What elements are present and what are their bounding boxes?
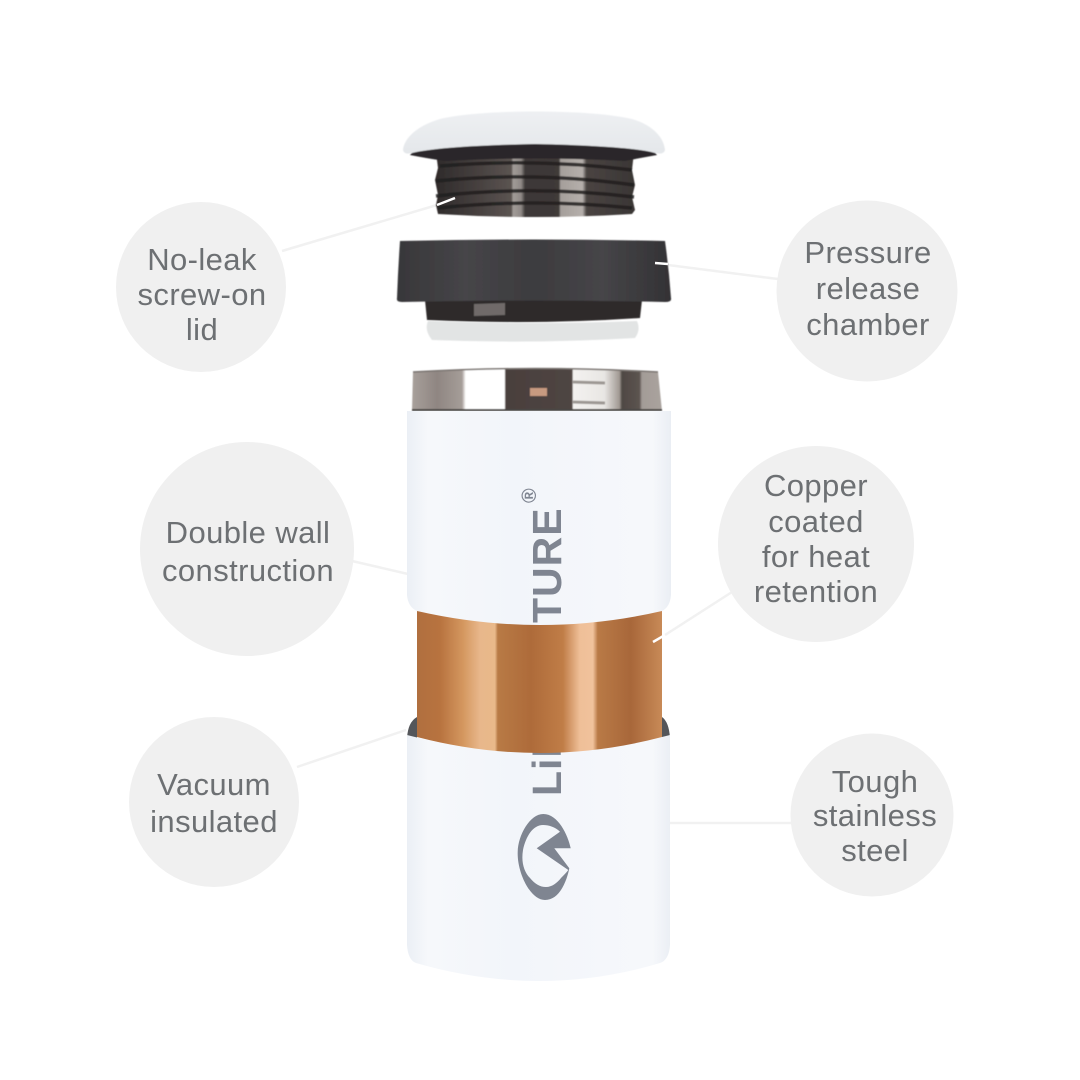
inner wall visible behind copper bbox=[407, 717, 670, 740]
brand text, upper part: TURE bbox=[524, 507, 570, 623]
callout: tough stainless steel: stainless bbox=[813, 798, 937, 833]
leader line: double wall bbox=[352, 561, 408, 574]
lid pointer tick bbox=[437, 198, 455, 205]
callout: pressure release chamber: chamber bbox=[806, 307, 930, 342]
callout: tough stainless steel bbox=[790, 734, 954, 896]
callout: no-leak screw-on lid: lid bbox=[186, 312, 218, 347]
callout: copper coated for heat retention bbox=[718, 446, 914, 642]
flask illustration bbox=[397, 112, 671, 981]
callout: copper coated for heat retention: for heat bbox=[762, 539, 870, 574]
callout: double wall construction bbox=[140, 442, 354, 656]
callout: pressure release chamber: release bbox=[816, 271, 920, 306]
pressure release chamber collar bbox=[397, 240, 671, 342]
callout: pressure release chamber bbox=[776, 200, 958, 382]
callout: no-leak screw-on lid: screw-on bbox=[138, 277, 266, 312]
brand logo mark bbox=[518, 814, 571, 900]
leader line: stainless steel bbox=[667, 822, 792, 824]
callout: double wall construction: construction bbox=[162, 553, 334, 588]
leader line: pressure release chamber bbox=[668, 265, 778, 279]
callout: copper coated for heat retention: retention bbox=[754, 574, 878, 609]
callout: tough stainless steel: steel bbox=[841, 833, 909, 868]
callout: no-leak screw-on lid bbox=[116, 202, 286, 372]
callout: double wall construction: Double wall bbox=[166, 515, 330, 550]
leader line: no-leak lid bbox=[282, 205, 437, 251]
brand text, lower part: LiF bbox=[524, 732, 570, 796]
copper coated band bbox=[417, 600, 662, 753]
upper body bbox=[407, 411, 671, 625]
screw-on lid bbox=[403, 112, 665, 217]
callout: copper coated for heat retention: coated bbox=[768, 504, 864, 539]
callout: vacuum insulated bbox=[129, 717, 299, 887]
callout: vacuum insulated: Vacuum bbox=[157, 767, 271, 802]
copper pointer tick bbox=[653, 635, 665, 642]
collar pointer tick bbox=[655, 263, 668, 264]
leader line: vacuum insulated bbox=[297, 730, 406, 767]
registered mark: ® bbox=[519, 488, 541, 503]
lower body sleeve bbox=[407, 735, 670, 981]
callout: copper coated for heat retention: Copper bbox=[764, 468, 868, 503]
leader line: copper coated bbox=[665, 592, 732, 635]
callout: tough stainless steel: Tough bbox=[832, 764, 918, 799]
callout: no-leak screw-on lid: No-leak bbox=[147, 242, 257, 277]
callout: pressure release chamber: Pressure bbox=[804, 235, 932, 270]
callout: vacuum insulated: insulated bbox=[150, 804, 278, 839]
stainless steel rim bbox=[412, 368, 662, 411]
